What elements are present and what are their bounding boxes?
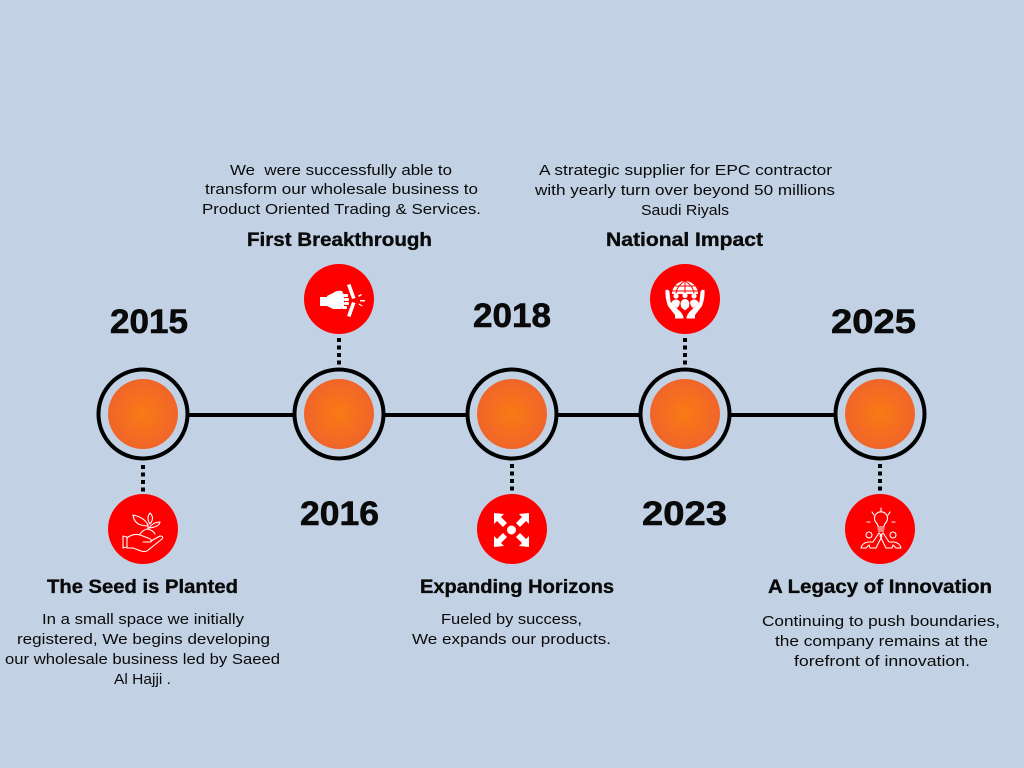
dotted connector: 2025 [878,464,882,495]
milestone node: 2015 [98,370,188,458]
year: 2016: 2016 [300,495,379,533]
icon: hand holding seedling [108,494,178,564]
icon: fist breaking through [304,264,374,334]
year: 2018: 2018 [473,297,551,335]
text block: First Breakthrough description [202,163,481,218]
milestone node: 2023 [640,370,730,458]
text block: Expanding Horizons description: We expands our products. [412,632,611,648]
heading: National Impact: National Impact [606,230,764,251]
text block: The Seed is Planted description: our wholesale business led by Saeed [5,652,280,668]
icon: light bulb above two people [845,494,915,564]
text block: Expanding Horizons description [412,612,611,648]
heading: First Breakthrough: First Breakthrough [247,230,432,251]
heading: A Legacy of Innovation: A Legacy of Innovation [768,577,992,598]
milestone node: 2018 [468,370,556,458]
dotted connector: 2023 [683,338,687,368]
text block: A Legacy of Innovation description [762,614,1000,670]
text block: First Breakthrough description: Product Oriented Trading & Services. [202,202,481,218]
text block: First Breakthrough description: transform our wholesale business to [205,182,478,198]
milestone node: 2025 [836,370,924,458]
heading: The Seed is Planted: The Seed is Planted [47,577,238,598]
text block: First Breakthrough description: We were successfully able to [230,163,452,179]
text block: National Impact description: Saudi Riyals [641,203,729,219]
text block: A Legacy of Innovation description: Continuing to push boundaries, [762,614,1000,630]
text block: A Legacy of Innovation description: the company remains at the [775,634,988,650]
text block: Expanding Horizons description: Fueled by success, [441,612,582,628]
text block: The Seed is Planted description: Al Hajji . [114,672,171,688]
icon: hands holding globe [650,264,720,334]
dotted connector: 2015 [141,465,145,495]
year: 2015: 2015 [110,303,188,341]
text block: National Impact description [534,163,835,219]
heading: Expanding Horizons: Expanding Horizons [420,577,614,598]
milestone node: 2016 [294,370,384,458]
dotted connector: 2018 [510,464,514,495]
text block: National Impact description: with yearly turn over beyond 50 millions [534,183,835,199]
text block: A Legacy of Innovation description: forefront of innovation. [794,654,970,670]
text block: The Seed is Planted description [5,612,280,688]
dotted connector: 2016 [337,338,341,368]
text block: National Impact description: A strategic supplier for EPC contractor [539,163,832,179]
year: 2023: 2023 [642,495,727,533]
text block: The Seed is Planted description: registered, We begins developing [17,632,270,648]
icon: arrows expanding outward [477,494,547,564]
year: 2025: 2025 [831,303,916,341]
timeline line [143,413,880,417]
text block: The Seed is Planted description: In a small space we initially [42,612,245,628]
